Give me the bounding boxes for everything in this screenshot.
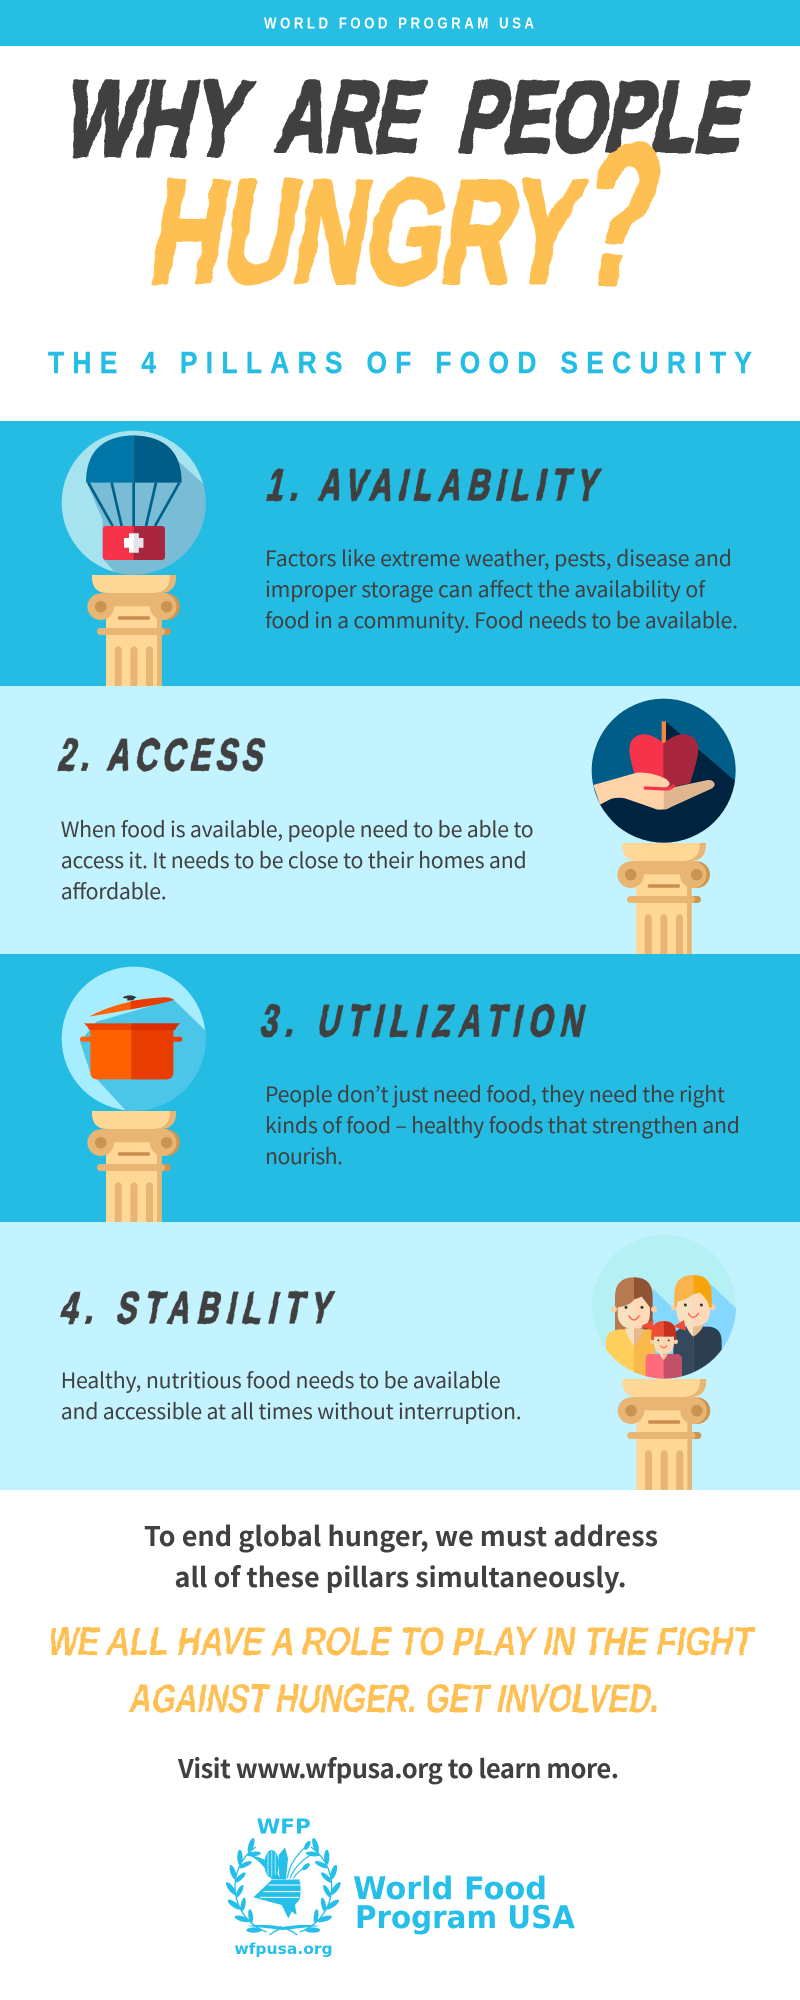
text: utilization: kinds of food – healthy foods that strengthen and: [265, 1109, 740, 1140]
title line: why are people: ARE: [269, 61, 435, 173]
text: availability: [265, 542, 738, 635]
wreath: [224, 1837, 342, 1935]
text: access: [61, 813, 534, 906]
heading: availability: 1. AVAILABILITY: [263, 461, 604, 510]
logo emblem: wfpusa.org: [234, 1940, 333, 1958]
text: stability: and accessible at all times without interruption.: [61, 1395, 522, 1426]
logo wordmark: [353, 1871, 575, 1936]
text: utilization: People don’t just need food, they need the right: [265, 1078, 725, 1109]
text: stability: Healthy, nutritious food needs to be available: [61, 1364, 501, 1395]
panel: utilization: [0, 954, 800, 1222]
heading: stability: 4. STABILITY: [57, 1284, 338, 1333]
text: utilization: nourish.: [265, 1140, 343, 1171]
text: access: affordable.: [61, 875, 167, 906]
pillar: [87, 575, 180, 686]
banner label: WORLD FOOD PROGRAM USA: [264, 16, 535, 33]
pillar: [618, 1379, 710, 1490]
visit link text: Visit www.wfpusa.org to learn more.: [177, 1749, 619, 1786]
title line: hungry: HUNGRY: [140, 151, 594, 314]
title line: hungry: [140, 102, 678, 326]
panel: availability: [0, 421, 800, 686]
text: utilization: [265, 1078, 740, 1171]
title line: why are people: [55, 59, 757, 180]
closing statement: [144, 1515, 658, 1595]
text: stability: [61, 1364, 522, 1426]
icon: apple in hand: [592, 699, 740, 853]
logo wordmark: Program USA: [355, 1900, 575, 1936]
text: access: access it. It needs to be close to their homes and: [61, 844, 527, 875]
subtitle: THE 4 PILLARS OF FOOD SECURITY: [48, 346, 752, 381]
logo emblem: [224, 1814, 342, 1958]
logo emblem: WFP: [257, 1814, 311, 1838]
logo: world food program usa: [224, 1814, 575, 1958]
text: availability: improper storage can affect the availability of: [265, 573, 706, 604]
icon: family: [592, 1235, 738, 1384]
title: [55, 59, 757, 326]
panel: access: [0, 686, 800, 954]
logo wordmark: World Food: [353, 1871, 547, 1907]
text: access: When food is available, people need to be able to: [61, 813, 534, 844]
heading: access: 2. ACCESS: [55, 731, 270, 780]
pillar: [87, 1111, 180, 1222]
top banner: [0, 0, 800, 46]
call to action: [44, 1619, 758, 1721]
text: availability: food in a community. Food needs to be available.: [265, 604, 738, 635]
heading: utilization: 3. UTILIZATION: [257, 997, 589, 1046]
title line: hungry: ?: [566, 102, 678, 326]
text: availability: Factors like extreme weather, pests, disease and: [265, 542, 732, 573]
wheat and corn in hand: [248, 1840, 315, 1918]
pillar: [617, 843, 710, 954]
title line: why are people: WHY: [55, 59, 261, 180]
panel: stability: [0, 1222, 800, 1490]
closing statement: all of these pillars simultaneously.: [174, 1556, 626, 1595]
icon: cooking pot: [62, 967, 208, 1113]
icon: parachute: [62, 431, 208, 577]
closing statement: To end global hunger, we must address: [144, 1515, 658, 1554]
